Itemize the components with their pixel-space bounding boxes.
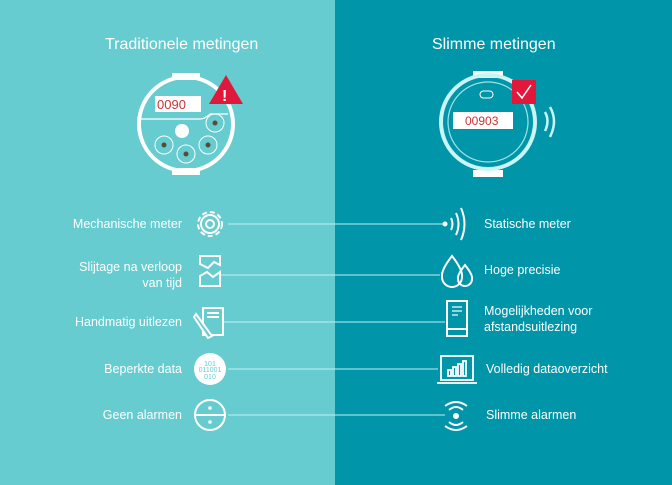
title: smart: Slimme metingen [432,36,556,53]
left labels: Mechanische meter [73,217,182,231]
text: Slimme alarmen [486,408,576,422]
text: Slijtage na verloop [79,260,182,274]
warning icon [209,75,243,104]
text: van tijd [142,276,182,290]
right labels: Statische meter [484,217,571,231]
icon: tablet [447,301,467,336]
icon: drops [442,256,472,287]
icon: wireless [444,208,464,240]
text: Volledig dataoverzicht [486,362,608,376]
icon: binary data: 010 [204,374,216,381]
icon: alarm waves [445,402,467,430]
traditional meter [139,73,243,175]
icon: notepad [194,308,223,338]
icon: binary data: 101 [204,361,216,368]
text: afstandsuitlezing [484,320,577,334]
text: Handmatig uitlezen [75,315,182,329]
icon: no alarm [195,400,225,430]
traditional meter: ! [222,88,227,105]
smart meter: 00903 [465,114,499,128]
text: Beperkte data [104,362,182,376]
text: Mogelijkheden voor [484,304,592,318]
icon: wear [200,256,220,286]
icon: binary data [194,353,226,385]
connector lines [220,224,445,415]
icon: laptop chart [437,356,477,383]
title: traditional: Traditionele metingen [105,36,258,53]
check badge [512,80,536,104]
text: Hoge precisie [484,263,560,277]
icon: gear [198,212,222,236]
smart meter [441,71,554,177]
icon: binary data: 011001 [199,367,222,374]
traditional meter: 3 [193,96,199,108]
traditional meter: 0090 [157,97,186,112]
text: Geen alarmen [103,408,182,422]
